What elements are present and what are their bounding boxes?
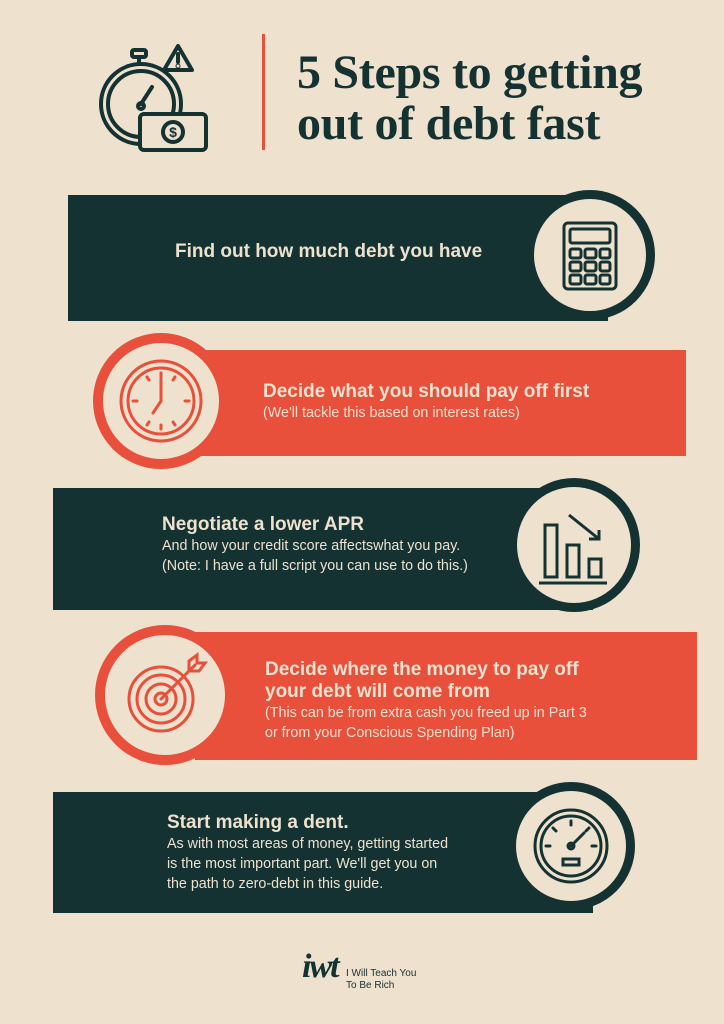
step 4 text: (This can be from extra cash you freed up in Part 3 [265,705,587,721]
title [297,46,642,150]
step 5 text [167,812,448,892]
header icon: stopwatch with warning and cash [99,44,208,152]
logo [302,948,416,991]
step 2 icon: clock [93,333,229,469]
step 5 icon: gauge [507,782,635,910]
step 3 text: And how your credit score affectswhat you pay. [162,538,460,554]
step 3 text: (Note: I have a full script you can use to do this.) [162,558,468,574]
step 2 text [263,381,589,421]
step 5 text: the path to zero-debt in this guide. [167,876,383,892]
logo: iwt [302,948,338,985]
step 3 text: Negotiate a lower APR [162,514,364,535]
logo: To Be Rich [346,980,394,991]
step 1 text: Find out how much debt you have [175,241,482,262]
step 3 icon: declining bars [508,478,640,612]
step 4 text [265,659,587,741]
step 5 text: Start making a dent. [167,812,349,833]
step 4 text: your debt will come from [265,681,490,702]
step 5 text: is the most important part. We'll get you on [167,856,437,872]
step 4 icon: target [95,625,235,765]
step 5 text: As with most areas of money, getting started [167,836,448,852]
header icon: stopwatch with warning and cash: $ [169,124,177,140]
divider line [262,34,265,150]
step 2 text: (We'll tackle this based on interest rates) [263,405,520,421]
logo: I Will Teach You [346,968,416,979]
step 2 text: Decide what you should pay off first [263,381,589,402]
step 4 text: Decide where the money to pay off [265,659,579,680]
title: 5 Steps to getting [297,46,642,99]
step 4 text: or from your Conscious Spending Plan) [265,725,515,741]
title: out of debt fast [297,97,600,150]
step 3 text [162,514,468,574]
step 1 icon: calculator [525,190,655,320]
